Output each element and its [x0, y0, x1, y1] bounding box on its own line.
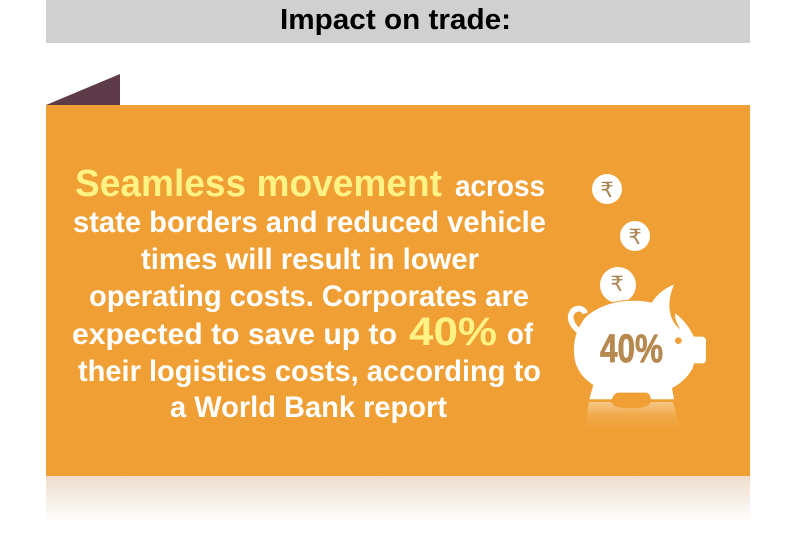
icon: rupee coin 2: [620, 221, 650, 251]
main text block: 40%: [409, 310, 497, 354]
main text block: [72, 163, 546, 424]
main text block: a World Bank report: [170, 391, 447, 424]
main text block: of: [507, 318, 533, 351]
main text block: their logistics costs, according to: [78, 355, 541, 388]
icon: rupee coin 3: ₹: [610, 272, 624, 296]
icon: rupee coin 1: ₹: [600, 178, 614, 202]
panel shadow: [46, 476, 750, 522]
title bar: Impact on trade:: [280, 4, 511, 36]
icon: rupee coin 2: ₹: [628, 225, 642, 249]
orange panel: [46, 105, 750, 476]
main text block: operating costs. Corporates are: [89, 280, 529, 313]
main text block: expected to save up to: [72, 318, 397, 351]
main text block: times will result in lower: [141, 243, 480, 276]
icon: rupee coin 1: [592, 174, 622, 204]
piggy bank label: 40%: [600, 327, 663, 371]
icon: rupee coin 3: [600, 267, 636, 303]
folded corner triangle: [46, 74, 120, 105]
main text block: across: [455, 170, 545, 203]
main text block: state borders and reduced vehicle: [73, 206, 546, 239]
icon: piggy bank: [571, 285, 706, 430]
title bar: [46, 0, 750, 43]
main text block: Seamless movement: [75, 163, 442, 205]
